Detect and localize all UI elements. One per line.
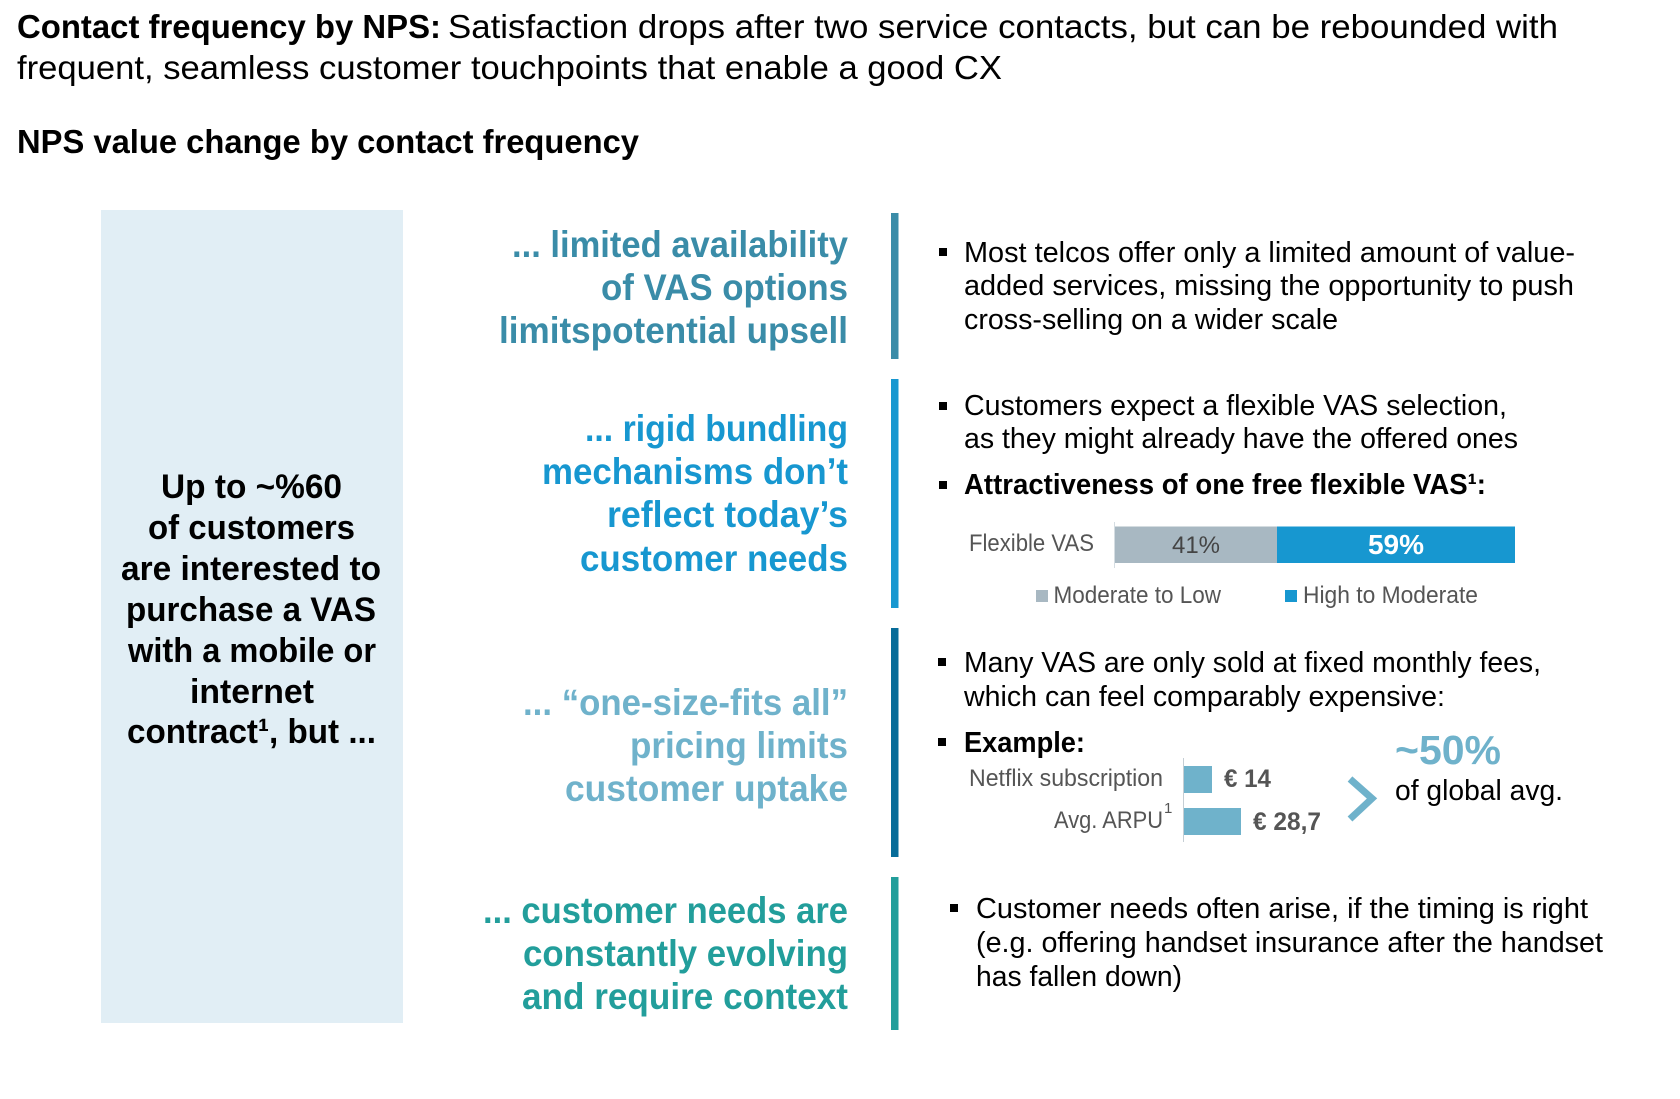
row 3 bullet text: [938, 647, 1541, 759]
row 4 heading: ... customer needs are: [483, 890, 848, 931]
callout: 50 percent of global average: [1395, 727, 1563, 807]
bar chart: price comparison: € 14: [1224, 765, 1271, 793]
bar chart: price comparison: Avg. ARPU: [1054, 807, 1163, 834]
row 3 heading: customer uptake: [565, 768, 848, 809]
row 2: rigid bundling: [542, 379, 1518, 609]
row 1 heading: limitspotential upsell: [499, 310, 848, 351]
row 1 heading: of VAS options: [601, 267, 848, 308]
stacked bar chart: flexible VAS: Flexible VAS: [969, 530, 1094, 557]
title: [17, 8, 1558, 86]
chart legend: High to Moderate: [1303, 582, 1478, 609]
stacked bar chart: flexible VAS: 41%: [1172, 532, 1220, 559]
bar chart: price comparison: 1: [1164, 800, 1172, 817]
row 1 bullet text: cross-selling on a wider scale: [964, 304, 1338, 336]
row 2 bullet text: Customers expect a flexible VAS selection,: [964, 390, 1507, 422]
row 2 heading: mechanisms don’t: [542, 451, 848, 492]
stacked bar chart: flexible VAS: [969, 522, 1515, 568]
row 3: one-size-fits-all pricing: [523, 628, 1563, 857]
chart legend: Moderate to Low: [1054, 582, 1222, 609]
row 4 heading: and require context: [522, 976, 848, 1017]
title: frequent, seamless customer touchpoints that enable a good CX: [17, 49, 1002, 86]
summary text: with a mobile or: [127, 632, 376, 670]
row 3 heading: pricing limits: [630, 725, 848, 766]
subheading: NPS value change by contact frequency: [17, 123, 640, 160]
row 2 bullet text: Attractiveness of one free flexible VAS¹:: [964, 469, 1486, 501]
summary text: [121, 468, 381, 751]
row 4 bullet text: has fallen down): [976, 961, 1182, 993]
summary text: purchase a VAS: [126, 591, 376, 629]
bar chart: price comparison: [969, 758, 1321, 842]
summary text: are interested to: [121, 550, 381, 588]
callout: 50 percent of global average: of global avg.: [1395, 775, 1563, 807]
row 2 heading: customer needs: [580, 538, 848, 579]
row 1 bullet text: added services, missing the opportunity to push: [964, 270, 1574, 302]
row 3 heading: [523, 682, 848, 809]
row 2 divider: [891, 379, 898, 608]
summary text: Up to ~%60: [161, 468, 342, 506]
stacked bar chart: flexible VAS: 59%: [1368, 529, 1424, 560]
summary text: internet: [190, 673, 314, 711]
icon: chevron: [1350, 779, 1372, 819]
row 4 bullet text: Customer needs often arise, if the timing is right: [976, 893, 1588, 925]
row 4 heading: [483, 890, 848, 1017]
row 2 heading: ... rigid bundling: [585, 408, 848, 449]
row 3 heading: ... “one-size-fits all”: [523, 682, 848, 723]
row 3 bullet text: Example:: [964, 727, 1085, 759]
row 2 heading: reflect today’s: [607, 494, 848, 535]
row 3 divider: [891, 628, 898, 857]
row 4 bullet text: [950, 893, 1603, 993]
bar chart: price comparison: Netflix subscription: [969, 765, 1163, 792]
bar chart: price comparison: € 28,7: [1253, 808, 1321, 836]
row 4 bullet text: (e.g. offering handset insurance after the handset: [976, 927, 1603, 959]
row 1 heading: [499, 224, 848, 351]
row 1: limited VAS availability: [499, 213, 1575, 359]
row 1 divider: [891, 213, 898, 359]
row 4: evolving customer needs: [483, 877, 1603, 1030]
row 4 heading: constantly evolving: [523, 933, 848, 974]
summary text: of customers: [148, 509, 355, 547]
summary text: contract¹, but ...: [127, 713, 376, 751]
title: Satisfaction drops after two service contacts, but can be rebounded with: [448, 8, 1558, 45]
callout: 50 percent of global average: ~50%: [1395, 727, 1501, 773]
row 1 heading: ... limited availability: [512, 224, 848, 265]
row 2 bullet text: as they might already have the offered ones: [964, 423, 1518, 455]
row 3 bullet text: Many VAS are only sold at fixed monthly fees,: [964, 647, 1541, 679]
row 3 bullet text: which can feel comparably expensive:: [963, 681, 1445, 713]
row 2 bullet text: [939, 390, 1518, 501]
row 1 bullet text: Most telcos offer only a limited amount of value-: [964, 237, 1575, 269]
row 2 heading: [542, 408, 848, 579]
row 1 bullet text: [939, 237, 1575, 336]
panel: left summary: [101, 210, 403, 1023]
row 4 divider: [891, 877, 898, 1030]
chart legend: [1036, 582, 1478, 609]
title: Contact frequency by NPS:: [17, 8, 441, 45]
